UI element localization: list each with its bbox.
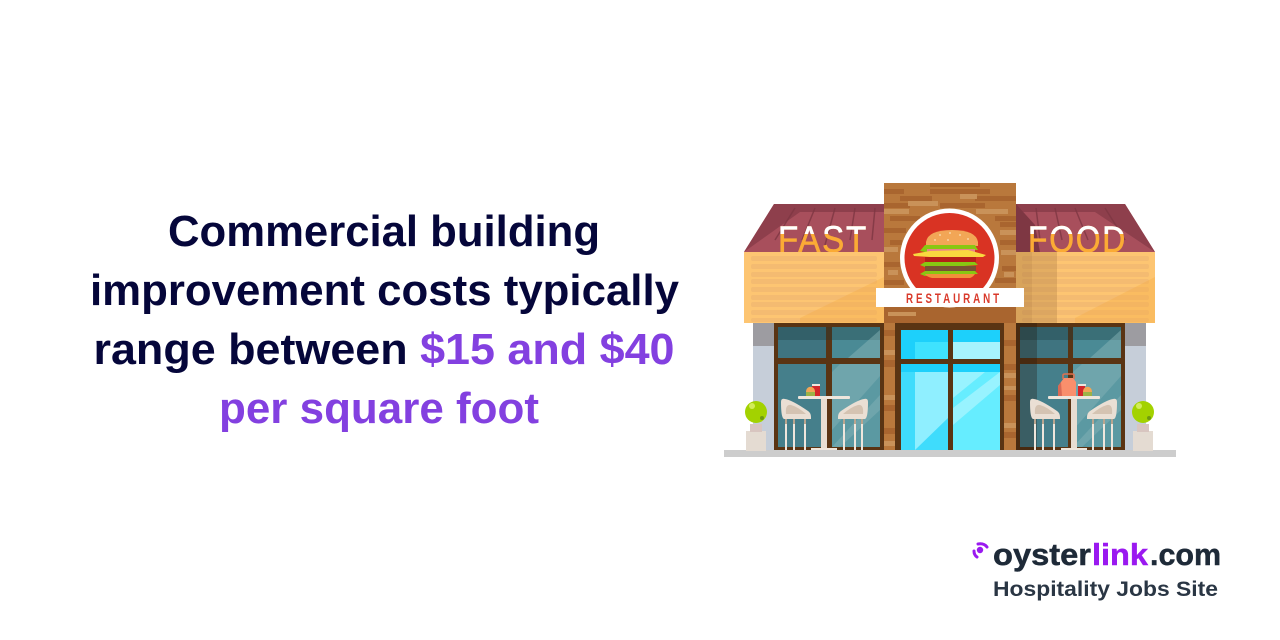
restaurant banner: RESTAURANT xyxy=(906,290,1000,306)
title: improvement costs typically xyxy=(90,266,680,315)
brick tower xyxy=(884,183,1016,450)
chair right xyxy=(838,399,868,450)
sign: FAST: FAST xyxy=(778,219,868,260)
side walls xyxy=(753,323,1146,450)
title: Commercial building xyxy=(168,207,600,256)
sign: FOOD xyxy=(1030,226,1124,252)
logo: oysterlink.com xyxy=(974,537,1221,601)
left window xyxy=(774,323,884,450)
burger xyxy=(913,230,986,278)
right potted plant xyxy=(1132,401,1154,451)
wordmark: oyster xyxy=(993,537,1091,572)
door xyxy=(895,323,1004,450)
chair left xyxy=(1030,399,1060,450)
right window xyxy=(1016,323,1125,450)
right table and chairs xyxy=(1030,374,1117,450)
burger and drink xyxy=(806,384,820,396)
table xyxy=(798,396,850,399)
burger badge xyxy=(900,208,999,308)
wordmark xyxy=(993,537,1221,572)
chair right xyxy=(1087,399,1117,450)
title: range between $15 and $40 xyxy=(94,325,674,374)
chair left xyxy=(781,399,811,450)
wordmark: link xyxy=(1092,537,1149,572)
left potted plant xyxy=(745,401,767,451)
right roof xyxy=(1016,204,1155,252)
title: per square foot xyxy=(219,384,539,433)
title xyxy=(90,207,680,433)
sign: FAST xyxy=(780,226,866,252)
left roof xyxy=(744,204,884,252)
icon: oyster signal xyxy=(974,544,987,557)
right awning xyxy=(1016,252,1155,323)
restaurant banner xyxy=(876,288,1024,307)
left awning xyxy=(744,252,884,323)
sign: FOOD: FOOD xyxy=(1028,219,1127,260)
ground xyxy=(724,450,1176,457)
wordmark: .com xyxy=(1150,537,1221,572)
sign: FAST: FAST xyxy=(778,219,868,260)
tagline: Hospitality Jobs Site xyxy=(993,578,1218,601)
takeaway bag, burger and drink xyxy=(1058,374,1092,396)
left table and chairs xyxy=(781,384,868,450)
table xyxy=(1048,396,1100,399)
illustration: fast food restaurant xyxy=(724,183,1176,457)
sign: FOOD: FOOD xyxy=(1028,219,1127,260)
